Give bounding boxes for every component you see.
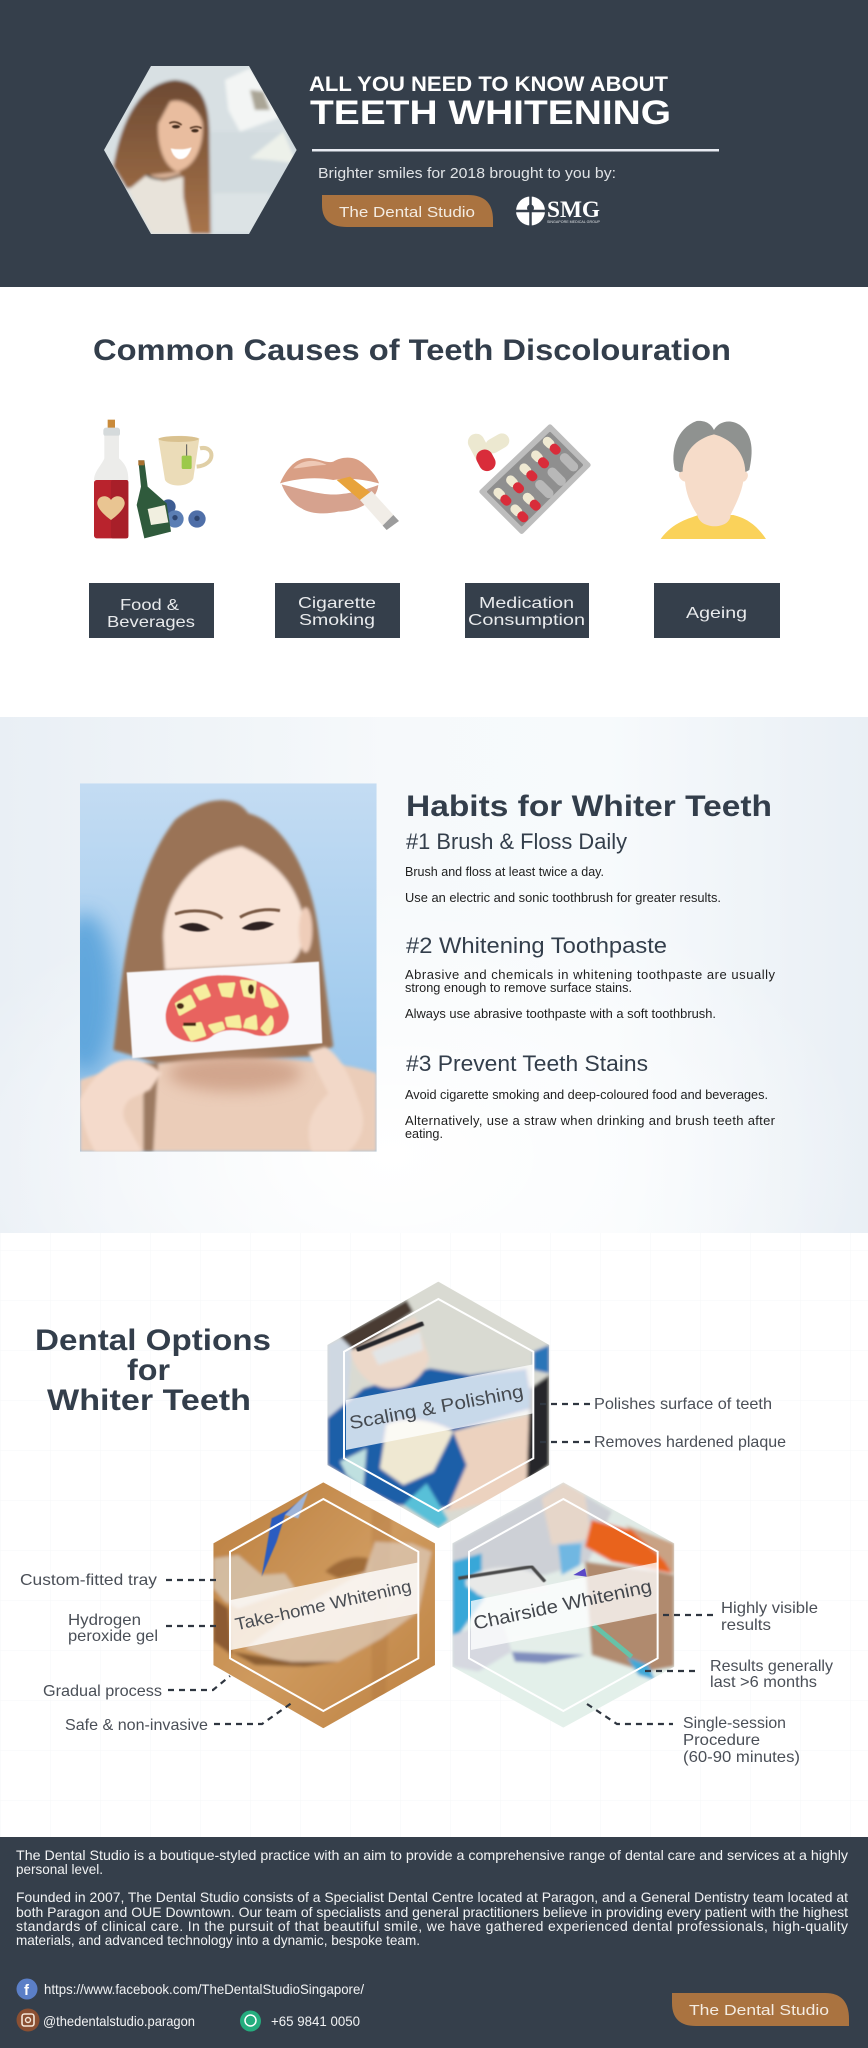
callouts: chairside whitening: Highly visible [721,1600,818,1617]
habit 1 [405,829,721,905]
hexagon: take-home whitening [213,1482,435,1728]
habit 2: Abrasive and chemicals in whitening toothpaste are usually [405,967,776,982]
habit 1: Use an electric and sonic toothbrush for greater results. [405,890,721,905]
label: ageing [654,583,780,638]
heading: common causes: Common Causes of Teeth Discolouration [93,334,731,367]
band label: Chairside Whitening [471,1575,654,1634]
logo: SMG: SINGAPORE MEDICAL GROUP [547,220,601,224]
label: medication consumption: Consumption [468,612,585,629]
callouts: scaling and polishing: Removes hardened plaque [594,1434,786,1451]
icon: instagram [16,2008,40,2032]
habit 2: strong enough to remove surface stains. [405,980,632,995]
band label [471,1562,657,1650]
hexagon: scaling and polishing [327,1282,550,1528]
callouts: chairside whitening [587,1600,833,1766]
heading: dental options: Dental Options [35,1324,271,1357]
habit 3: #3 Prevent Teeth Stains [406,1051,648,1076]
callouts: take-home whitening: Custom-fitted tray [20,1572,157,1589]
panel: habits for whiter teeth [0,717,868,1233]
label: cigarette smoking: Smoking [299,612,375,629]
band label [231,1562,418,1650]
callouts: chairside whitening: Single-session [683,1715,786,1732]
habit 2 [405,933,776,1021]
icon: lips with cigarette [280,458,399,530]
instagram handle: @thedentalstudio.paragon [43,2013,195,2029]
heading: dental options: Whiter Teeth [47,1384,251,1417]
heading: habits: Habits for Whiter Teeth [406,790,772,823]
about text: Founded in 2007, The Dental Studio consists of a Specialist Dental Centre located at Paragon, and a General Dentistry team located at [16,1889,848,1905]
callouts: take-home whitening: Safe & non-invasive [65,1717,208,1734]
title [309,73,671,132]
label: cigarette smoking: Cigarette [298,595,376,612]
callouts: chairside whitening: Procedure [683,1732,760,1749]
badge: The Dental Studio: The Dental Studio [339,204,475,221]
photo: woman holding card of decayed teeth [55,783,377,1152]
badge: The Dental Studio [322,195,493,227]
label: medication consumption: Medication [479,595,574,612]
panel: header banner [0,0,868,287]
title: ALL YOU NEED TO KNOW ABOUT [309,73,668,96]
callouts: chairside whitening: results [721,1617,771,1634]
label: food and beverages: Food & [120,597,179,614]
photo: smiling woman in hexagon [104,66,296,234]
about text: standards of clinical care. In the pursuit of that beautiful smile, we have gathered experienced dental professionals, high-quality [16,1918,848,1934]
band label: Scaling & Polishing [348,1380,525,1433]
about text: materials, and advanced technology into a dynamic, bespoke team. [16,1932,420,1948]
about text: both Paragon and OUE Downtown. Our team of specialists and general practitioners believe in providing every patient with the highest [16,1904,848,1920]
habit 3: Avoid cigarette smoking and deep-coloured food and beverages. [405,1087,768,1102]
callouts: take-home whitening: peroxide gel [68,1628,158,1645]
icon: facebook [16,1978,38,2000]
phone number: +65 9841 0050 [271,2013,360,2029]
callouts: take-home whitening [20,1572,293,1734]
hexagon: chairside whitening [452,1482,674,1728]
subtitle: Brighter smiles for 2018 brought to you by: [318,165,616,182]
callouts: chairside whitening: (60-90 minutes) [683,1749,800,1766]
habit 3: Alternatively, use a straw when drinking and brush teeth after [405,1113,776,1128]
panel: common causes [89,334,780,638]
callouts: scaling and polishing [540,1396,786,1451]
badge: footer The Dental Studio: The Dental Studio [689,2002,829,2019]
icon: whatsapp [240,2010,261,2032]
label: food and beverages: Beverages [107,614,195,631]
label: medication consumption [465,583,589,638]
band label: Take-home Whitening [233,1576,413,1634]
badge: footer The Dental Studio [672,1993,849,2026]
habit 1: #1 Brush & Floss Daily [406,829,627,854]
habit 2: Always use abrasive toothpaste with a soft toothbrush. [405,1006,716,1021]
label: cigarette smoking [275,583,400,638]
title: TEETH WHITENING [310,94,671,132]
habit 3: eating. [405,1126,443,1141]
habit 3 [405,1051,776,1141]
about text: personal level. [16,1861,103,1877]
about text: The Dental Studio is a boutique-styled practice with an aim to provide a comprehensive range of dental care and services at a highly [16,1847,848,1863]
icon: food and beverages [94,420,211,538]
panel: footer [0,1837,868,2048]
label: ageing: Ageing [686,605,747,622]
icon: ageing person [661,421,766,539]
habit 1: Brush and floss at least twice a day. [405,864,604,879]
logo: SMG [516,196,601,226]
callouts: chairside whitening: last >6 months [710,1674,817,1691]
heading: dental options: for [127,1354,170,1387]
habit 2: #2 Whitening Toothpaste [406,933,667,958]
callouts: take-home whitening: Hydrogen [68,1612,141,1629]
callouts: scaling and polishing: Polishes surface of teeth [594,1396,772,1413]
callouts: take-home whitening: Gradual process [43,1683,162,1700]
callouts: chairside whitening: Results generally [710,1658,833,1675]
band label [346,1364,533,1450]
panel: dental options [0,1233,868,1837]
icon: facebook: f [24,1982,30,1999]
logo: SMG: SMG [547,197,600,222]
icon: medication [465,427,588,532]
label: food and beverages [89,583,214,638]
facebook link: https://www.facebook.com/TheDentalStudioSingapore/ [44,1981,364,1997]
about text [16,1847,848,1948]
heading: dental options [35,1324,271,1417]
